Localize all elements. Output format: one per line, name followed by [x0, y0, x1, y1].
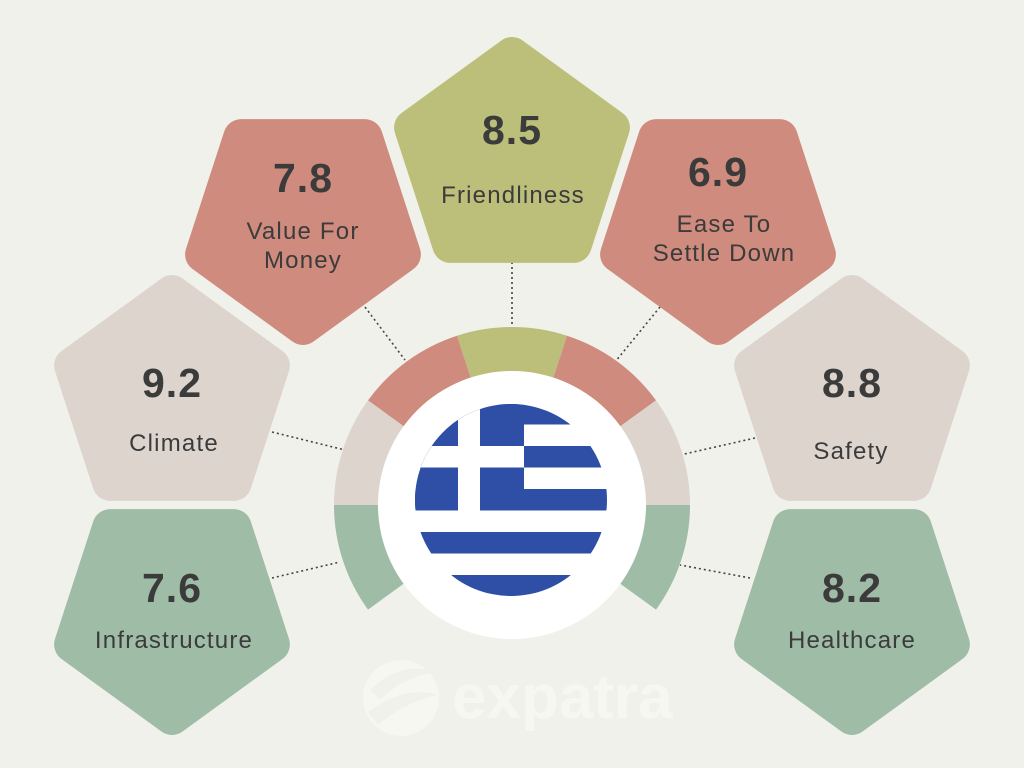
- panel: healthcare: Healthcare: [788, 627, 916, 654]
- icon: greek flag: [415, 404, 607, 596]
- connector: value for money: [365, 307, 405, 360]
- panel: value for money: Value For: [246, 218, 360, 245]
- panel: climate: 9.2: [142, 360, 202, 406]
- panel: climate: Climate: [129, 430, 219, 457]
- connector: ease to settle down: [615, 307, 660, 362]
- panel: infrastructure: [72, 527, 272, 717]
- panel: friendliness: [412, 55, 612, 245]
- panel: ease to settle down: 6.9: [688, 149, 748, 195]
- panel: healthcare: [752, 527, 952, 717]
- panel: infrastructure: 7.6: [142, 565, 202, 611]
- panel: ease to settle down: [618, 137, 818, 327]
- panel: ease to settle down: Ease To: [677, 211, 771, 238]
- connector: healthcare: [680, 565, 750, 578]
- panel: infrastructure: Infrastructure: [95, 627, 253, 654]
- connector: friendliness: [511, 262, 513, 330]
- panel: ease to settle down: Settle Down: [653, 240, 795, 267]
- panel: healthcare: 8.2: [822, 565, 882, 611]
- connector: climate: [272, 432, 345, 450]
- panel: friendliness: Friendliness: [441, 182, 585, 209]
- logo watermark: [363, 660, 673, 736]
- white circle: [378, 371, 646, 639]
- logo watermark: expatra: [452, 663, 673, 732]
- panel: safety: Safety: [813, 438, 889, 465]
- panel: friendliness: 8.5: [482, 107, 542, 153]
- ring chart: [334, 327, 690, 610]
- panel: value for money: 7.8: [273, 155, 333, 201]
- panel: value for money: Money: [264, 247, 342, 274]
- connector: safety: [680, 438, 755, 455]
- panel: value for money: [203, 137, 403, 327]
- panel: climate: [72, 293, 272, 483]
- panel: safety: [752, 293, 952, 483]
- panel: safety: 8.8: [822, 360, 882, 406]
- connector: infrastructure: [272, 562, 340, 578]
